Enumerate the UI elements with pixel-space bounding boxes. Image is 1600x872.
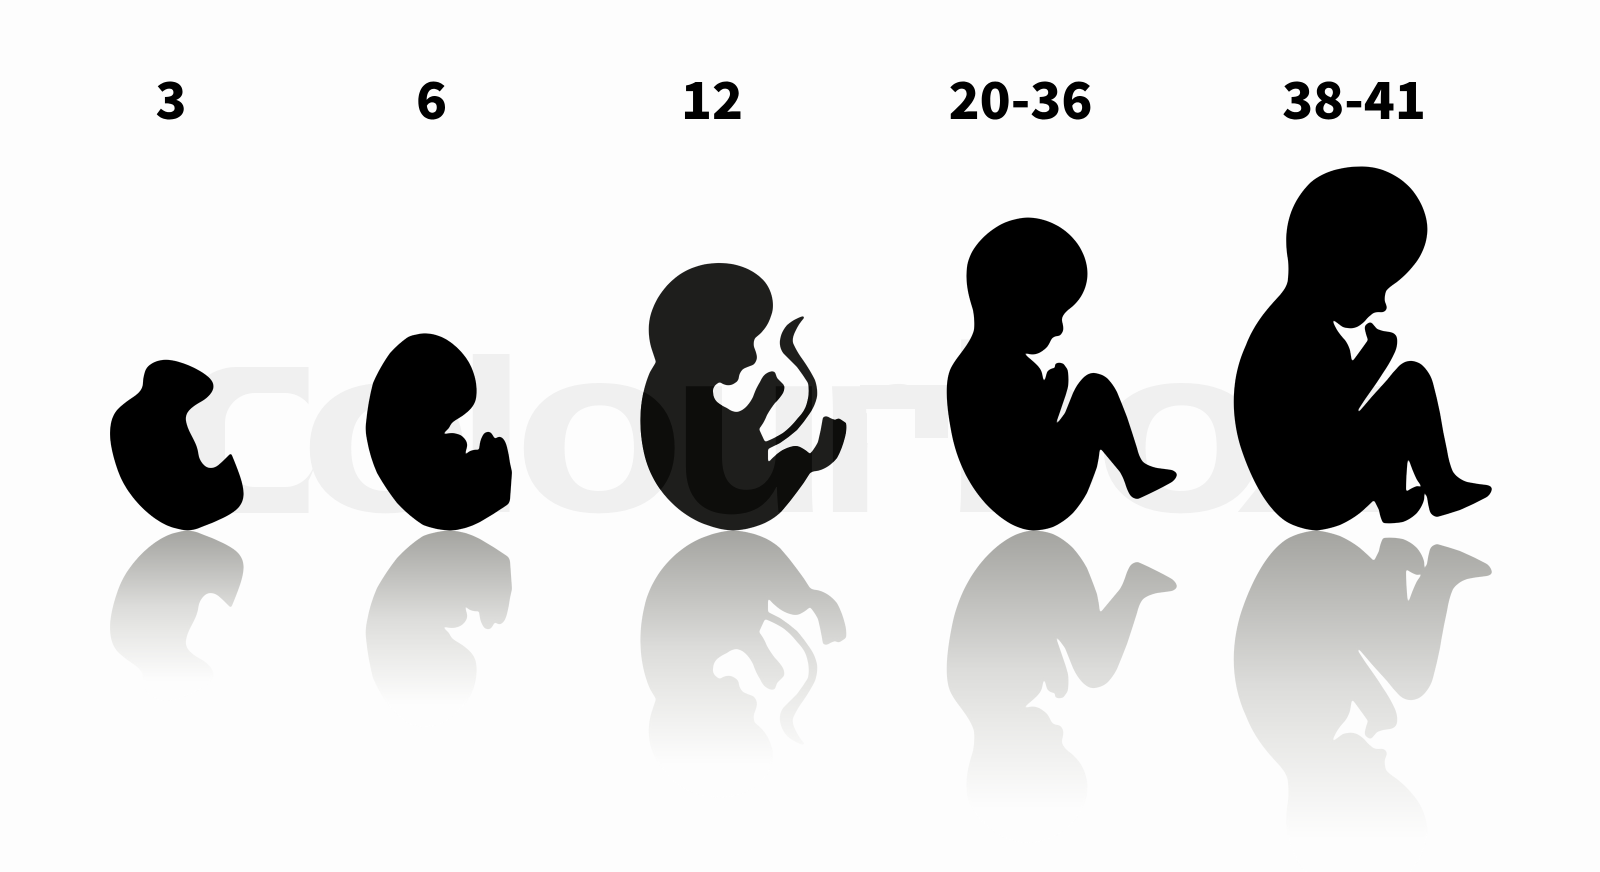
watermark: Colourbox bbox=[181, 296, 1386, 563]
watermark letters showing through the week 12 fetus: o bbox=[513, 296, 686, 562]
reflection: week 6 embryo bbox=[366, 530, 512, 728]
watermark: Colourbox: u bbox=[670, 298, 830, 563]
reflection: week 38-41 baby bbox=[1234, 530, 1492, 872]
watermark: Colourbox: l bbox=[454, 315, 528, 558]
watermark: Colourbox: C bbox=[181, 341, 312, 545]
silhouette: week 3 embryo bbox=[110, 360, 244, 530]
silhouette: week 20-36 fetus bbox=[947, 218, 1177, 530]
silhouette: week 38-41 baby bbox=[1234, 166, 1492, 530]
watermark: Colourbox: b bbox=[942, 298, 1109, 563]
watermark: Colourbox: x bbox=[1236, 297, 1386, 562]
reflection: week 12 fetus bbox=[640, 530, 846, 798]
week label: 12: 12 bbox=[681, 60, 743, 134]
reflection: week 20-36 fetus bbox=[947, 530, 1177, 844]
week label: 6: 6 bbox=[416, 60, 447, 134]
silhouette: week 6 embryo bbox=[366, 333, 512, 530]
reflection: week 3 embryo bbox=[110, 531, 244, 701]
week label: 3: 3 bbox=[155, 60, 187, 134]
watermark: Colourbox: o bbox=[513, 296, 686, 562]
watermark letters showing through the week 12 fetus: u bbox=[670, 298, 830, 563]
week label: 38-41: 38-41 bbox=[1282, 60, 1426, 134]
silhouette: week 12 fetus bbox=[640, 263, 846, 530]
week label: 20-36: 20-36 bbox=[949, 60, 1092, 134]
watermark: Colourbox: o bbox=[298, 296, 474, 561]
watermark letters showing through the week 12 fetus: r bbox=[816, 296, 913, 563]
watermark letters showing through the week 12 fetus bbox=[640, 386, 846, 514]
watermark: Colourbox: r bbox=[816, 296, 913, 563]
watermark: Colourbox: o bbox=[1092, 297, 1270, 562]
